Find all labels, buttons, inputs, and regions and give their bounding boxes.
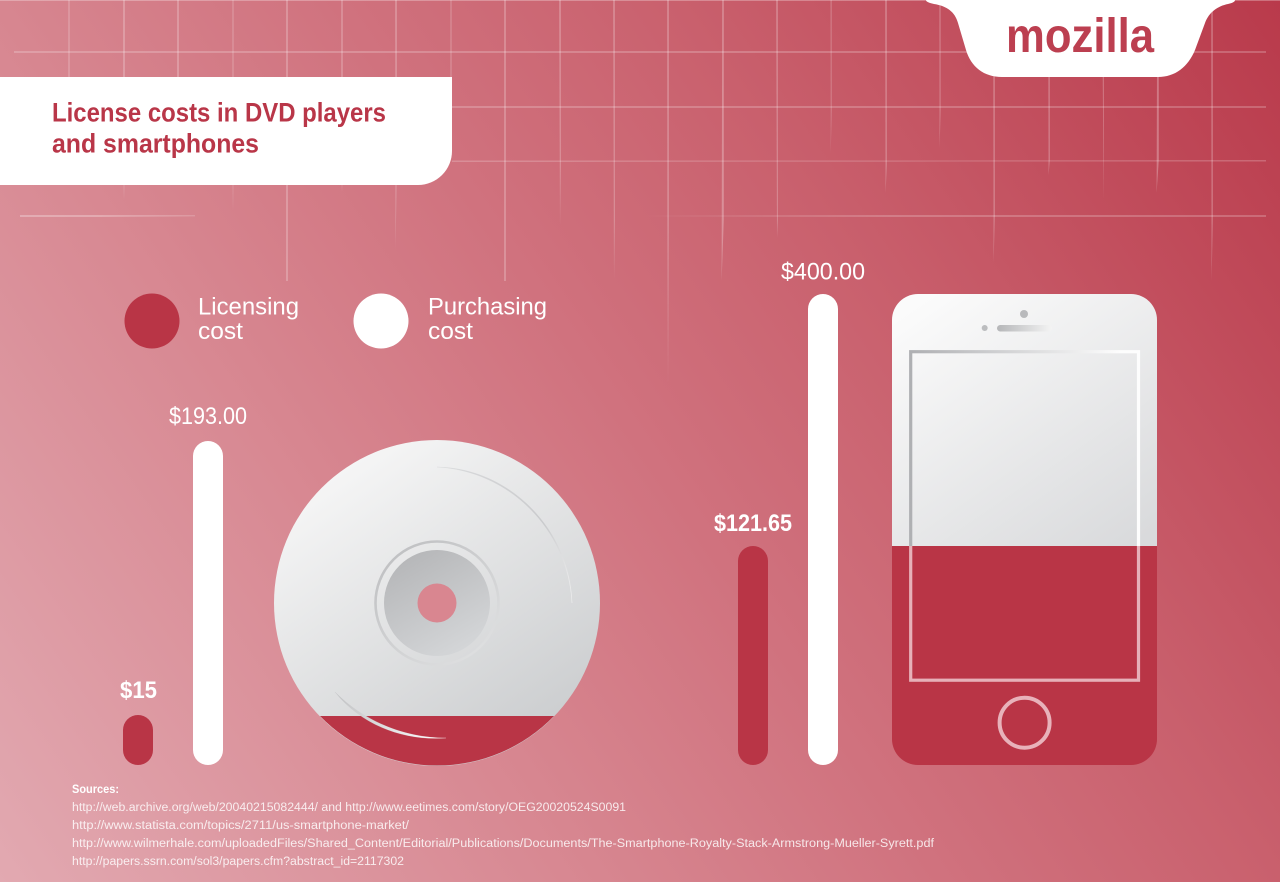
phone sensor xyxy=(982,325,988,331)
sources xyxy=(72,784,935,868)
sources: http://web.archive.org/web/20040215082444/ and http://www.eetimes.com/story/OEG20020524S0091 xyxy=(72,802,626,814)
phone home button xyxy=(1000,698,1050,748)
smartphone purchasing bar xyxy=(781,258,865,765)
legend: purchasing cost: cost xyxy=(428,318,473,345)
title: License costs in DVD players xyxy=(52,98,386,128)
legend: licensing cost: cost xyxy=(198,318,243,345)
sources: http://papers.ssrn.com/sol3/papers.cfm?abstract_id=2117302 xyxy=(72,856,404,868)
sources: http://www.statista.com/topics/2711/us-smartphone-market/ xyxy=(72,820,410,832)
legend: licensing cost: Licensing xyxy=(198,294,299,320)
sources: http://www.wilmerhale.com/uploadedFiles/Shared_Content/Editorial/Publications/Documents/The-Smartphone-Royalty-Stack-Armstrong-Mueller-Syrett.pdf xyxy=(72,838,935,850)
legend xyxy=(124,294,554,348)
mozilla logo tab xyxy=(926,0,1235,77)
icon: smartphone xyxy=(892,294,1157,765)
sources: Sources: xyxy=(72,784,119,796)
icon: DVD disc xyxy=(274,440,600,766)
phone screen outline xyxy=(911,352,1138,680)
DVD licensing bar: $15 xyxy=(120,677,157,704)
smartphone licensing bar: $121.65 xyxy=(714,510,792,537)
logo wordmark: mozilla xyxy=(1006,10,1154,63)
legend: purchasing cost xyxy=(354,294,554,348)
DVD purchasing bar xyxy=(169,403,247,765)
title panel xyxy=(0,77,452,185)
smartphone licensing bar xyxy=(714,510,792,765)
legend: purchasing cost: Purchasing xyxy=(428,294,547,320)
smartphone purchasing bar: $400.00 xyxy=(781,258,865,286)
disc hub xyxy=(376,542,498,664)
disc licensing fill xyxy=(320,716,554,766)
phone speaker xyxy=(997,325,1052,332)
phone camera xyxy=(1020,310,1028,318)
legend: licensing cost xyxy=(124,294,306,348)
DVD licensing bar xyxy=(120,677,157,765)
title: and smartphones xyxy=(52,128,259,158)
DVD purchasing bar: $193.00 xyxy=(169,403,247,430)
